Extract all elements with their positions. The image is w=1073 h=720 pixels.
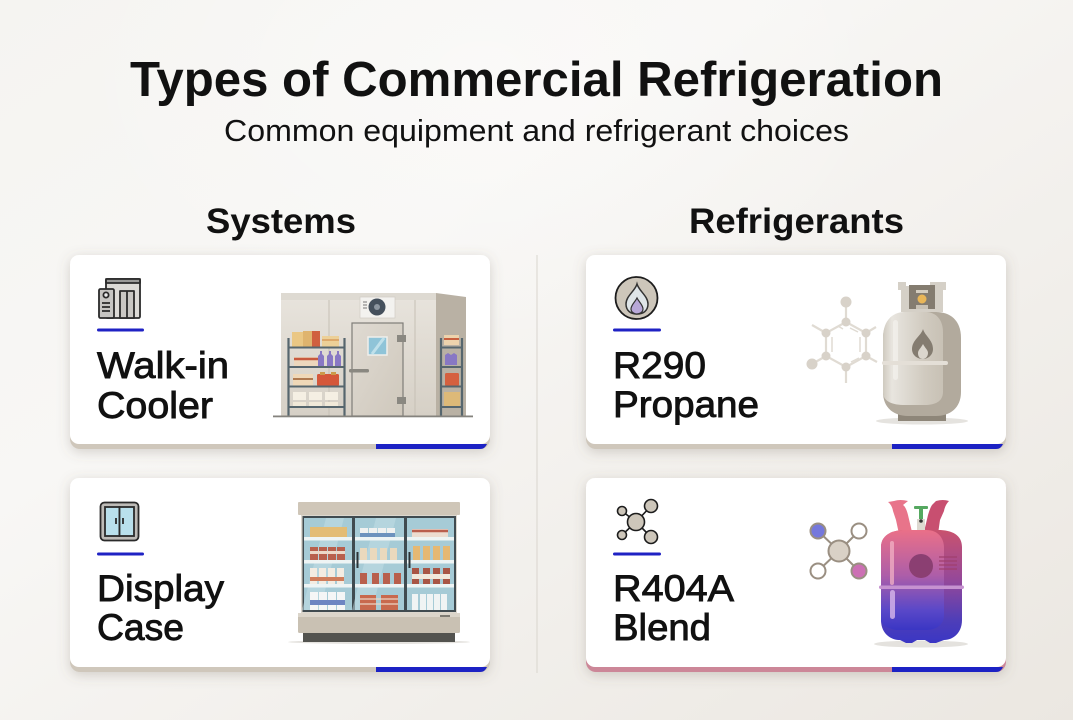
label: Cooler — [97, 384, 213, 426]
accent line — [613, 552, 661, 556]
illustration: walk-in cooler — [273, 293, 473, 417]
panel: display case — [70, 478, 490, 672]
label — [97, 344, 229, 426]
heading: refrigerants: Refrigerants — [689, 202, 904, 241]
icon: walk-in cooler — [99, 279, 140, 318]
heading: systems: Systems — [206, 202, 356, 241]
accent line — [97, 328, 144, 332]
card background — [70, 255, 490, 449]
accent line — [97, 552, 144, 556]
illustration: propane tank — [876, 282, 968, 424]
icon: flame — [616, 277, 658, 319]
card background — [586, 255, 1006, 449]
label: Walk-in — [97, 344, 229, 386]
card background — [586, 478, 1006, 672]
label: R404A — [613, 567, 734, 609]
icon: display case — [100, 502, 138, 540]
accent line — [613, 328, 661, 332]
illustration: R404A tank — [874, 500, 968, 648]
card background — [70, 478, 490, 672]
label — [97, 567, 224, 648]
illustration: molecule — [810, 524, 866, 578]
panel: R290 propane — [586, 255, 1006, 449]
illustration: molecule — [806, 296, 877, 383]
label: Display — [97, 567, 224, 609]
title: Types of Commercial Refrigeration — [130, 53, 943, 107]
label: R290 — [613, 344, 706, 386]
label — [613, 567, 734, 648]
subtitle: Common equipment and refrigerant choices — [224, 113, 849, 148]
panel: walk-in cooler — [70, 255, 490, 449]
label: Blend — [613, 606, 711, 648]
illustration: display case — [288, 502, 470, 644]
panel: R404A blend — [586, 478, 1006, 672]
label — [613, 344, 759, 425]
label: Case — [97, 606, 184, 648]
icon: molecule — [618, 500, 658, 544]
label: Propane — [613, 383, 759, 425]
